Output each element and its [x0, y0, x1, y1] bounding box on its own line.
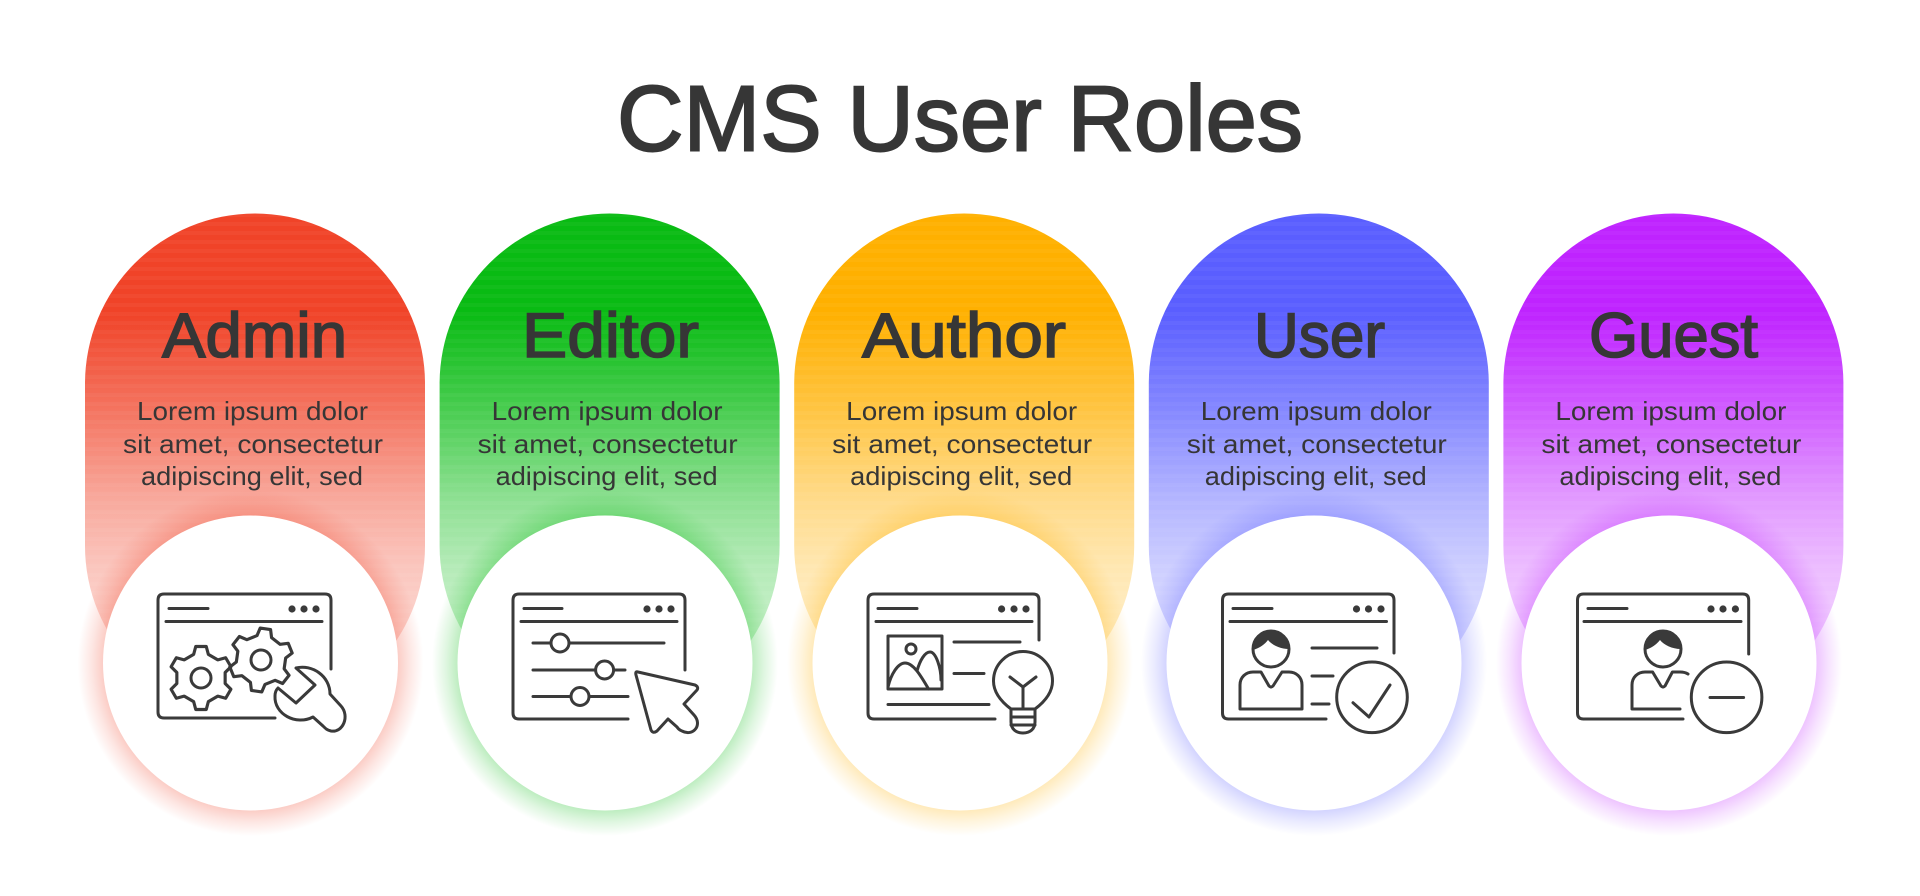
text: Guest description: sit amet, consectetur	[1541, 429, 1802, 459]
heading: Editor: Editor	[522, 301, 699, 371]
circle: Admin	[103, 516, 398, 810]
icon: window with sliders and cursor	[513, 594, 698, 733]
text: Admin description: adipiscing elit, sed	[141, 461, 363, 491]
title: CMS User Roles	[617, 66, 1303, 170]
circle: Guest	[1522, 516, 1816, 810]
capsule: Guest	[1503, 214, 1843, 716]
circle: User	[1166, 516, 1462, 810]
text: Admin description: Lorem ipsum dolor	[137, 396, 368, 426]
panel: Admin	[78, 214, 425, 836]
text: User description: adipiscing elit, sed	[1205, 461, 1427, 491]
heading: Guest: Guest	[1589, 301, 1758, 371]
capsule: Author	[794, 214, 1134, 716]
icon: window with person and check mark	[1222, 594, 1407, 733]
glow: Guest	[1496, 490, 1842, 836]
text: Admin description	[123, 396, 383, 491]
panel: Guest	[1496, 214, 1843, 836]
circle: Author	[812, 516, 1108, 810]
text: Author description: adipiscing elit, sed	[850, 461, 1072, 491]
panel: Author	[787, 214, 1134, 836]
heading: Author: Author	[862, 301, 1066, 371]
text: Admin description: sit amet, consectetur	[123, 429, 383, 459]
panel: User	[1141, 214, 1489, 836]
text: Author description: sit amet, consectetur	[832, 429, 1093, 459]
text: Editor description	[478, 396, 738, 491]
text: Editor description: Lorem ipsum dolor	[492, 396, 723, 426]
text: Editor description: sit amet, consectetur	[478, 429, 738, 459]
glow: User	[1141, 490, 1487, 836]
circle: Editor	[458, 516, 752, 810]
text: Author description: Lorem ipsum dolor	[846, 396, 1078, 426]
icon: window with image and light bulb	[868, 594, 1052, 733]
text: Author description	[832, 396, 1093, 491]
heading: User: User	[1254, 301, 1385, 371]
text: Guest description: adipiscing elit, sed	[1559, 461, 1781, 491]
text: Guest description: Lorem ipsum dolor	[1555, 396, 1787, 426]
panel: Editor	[432, 214, 780, 836]
text: User description: Lorem ipsum dolor	[1201, 396, 1432, 426]
capsule: Admin	[85, 214, 425, 716]
icon: window with person and minus sign	[1578, 594, 1762, 733]
text: User description	[1187, 396, 1447, 491]
capsule: User	[1149, 214, 1489, 716]
text: Guest description	[1541, 396, 1802, 491]
glow: Author	[787, 490, 1133, 836]
capsule: Editor	[440, 214, 780, 716]
icon: window with gears and wrench	[158, 594, 345, 731]
text: Editor description: adipiscing elit, sed	[496, 461, 718, 491]
glow: Admin	[78, 490, 424, 836]
glow: Editor	[432, 490, 778, 836]
heading: Admin: Admin	[162, 301, 347, 371]
text: User description: sit amet, consectetur	[1187, 429, 1447, 459]
